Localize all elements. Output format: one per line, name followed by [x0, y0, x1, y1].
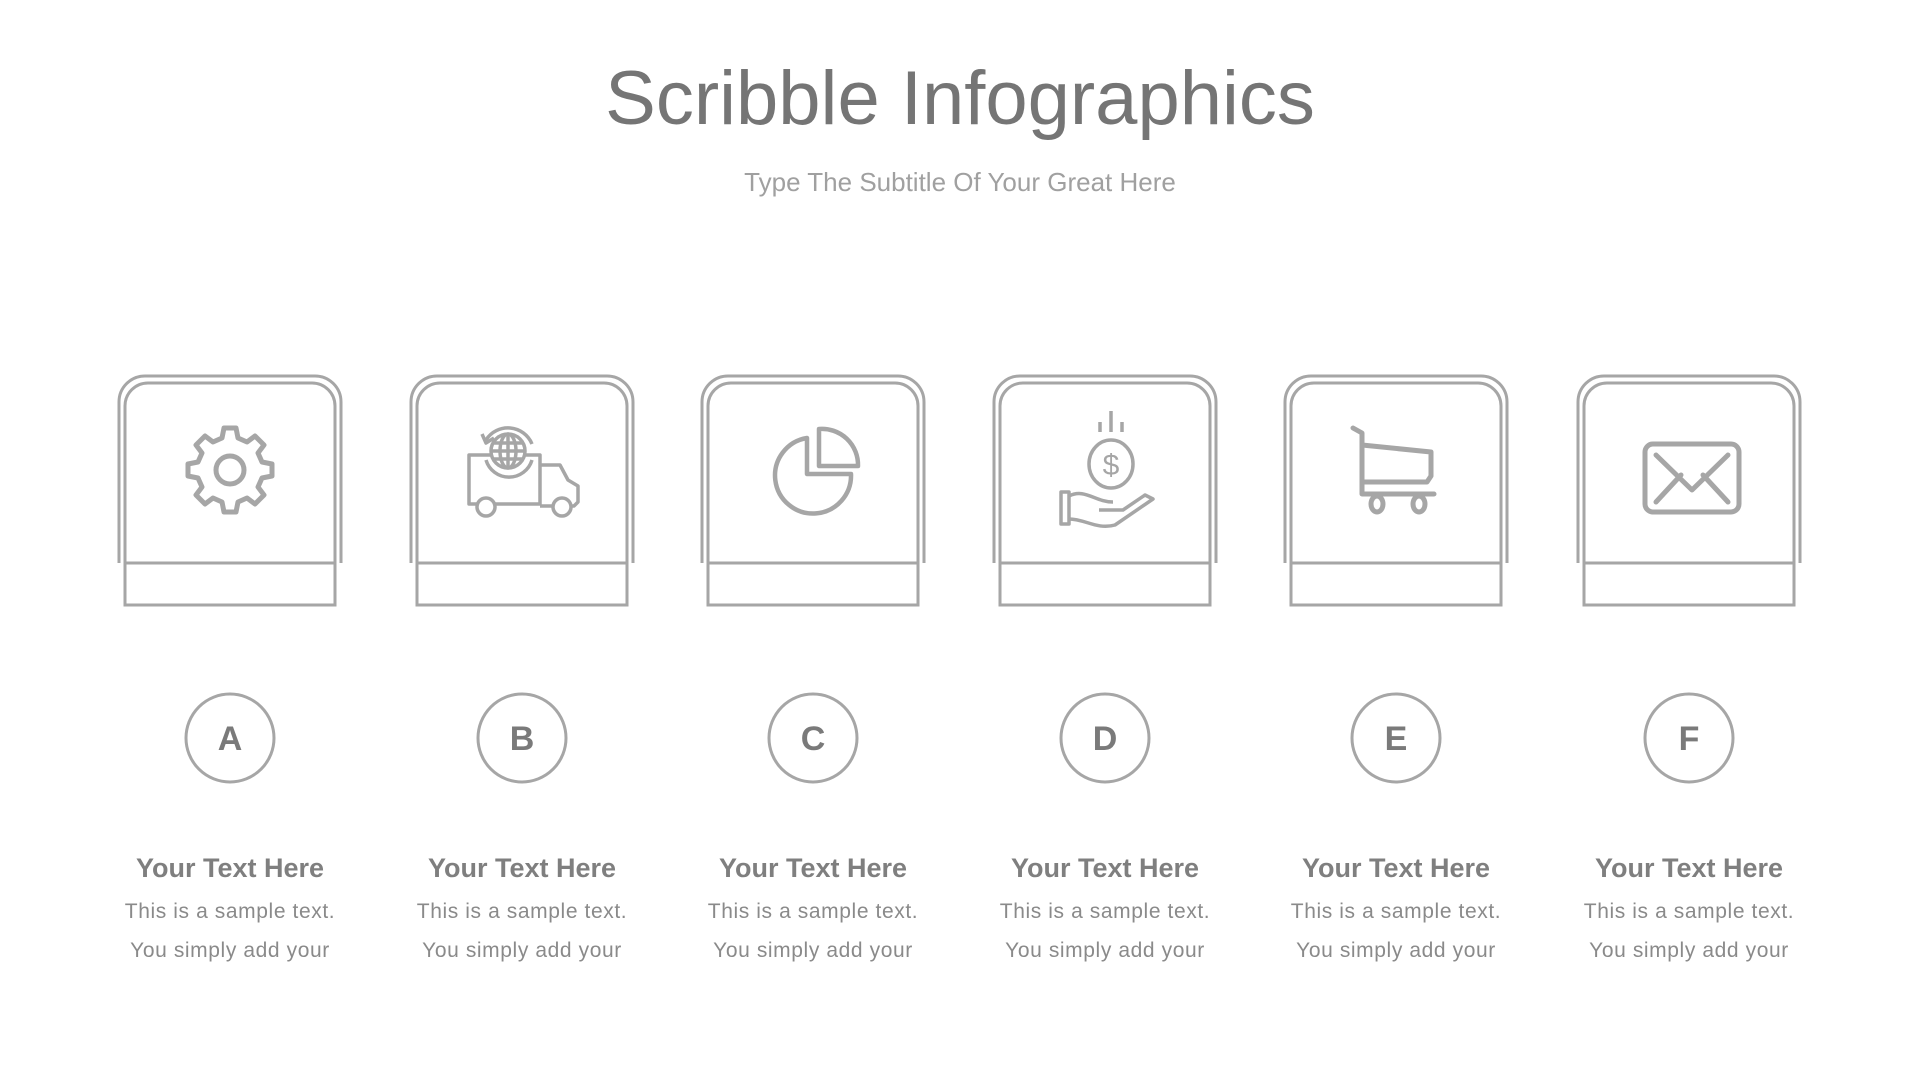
letter circle B — [478, 694, 566, 782]
text block E: Your Text Here — [1302, 853, 1490, 883]
text block C: You simply add your — [713, 939, 913, 962]
letter circle A: A — [218, 720, 242, 758]
text block B — [417, 853, 627, 962]
panel: A — [119, 376, 341, 962]
text block D: You simply add your — [1005, 939, 1205, 962]
panel: C — [702, 376, 924, 962]
text block D: This is a sample text. — [1000, 900, 1210, 923]
panel: F — [1578, 376, 1800, 962]
icon: coin in hand — [1061, 411, 1153, 526]
text block F: This is a sample text. — [1584, 900, 1794, 923]
panel: B — [411, 376, 633, 962]
panel: D — [994, 376, 1216, 962]
icon: pie chart — [775, 429, 858, 514]
text block F: Your Text Here — [1595, 853, 1783, 883]
text block B: This is a sample text. — [417, 900, 627, 923]
icon: coin in hand: $ — [1103, 449, 1120, 482]
text block A — [125, 853, 335, 962]
text block B: Your Text Here — [428, 853, 616, 883]
letter circle E: E — [1385, 720, 1407, 758]
letter circle E — [1352, 694, 1440, 782]
text block A: You simply add your — [130, 939, 330, 962]
text block C: Your Text Here — [719, 853, 907, 883]
letter circle B: B — [510, 720, 534, 758]
letter circle A — [186, 694, 274, 782]
text block C: This is a sample text. — [708, 900, 918, 923]
text block A: This is a sample text. — [125, 900, 335, 923]
letter circle D: D — [1093, 720, 1117, 758]
subtitle: Type The Subtitle Of Your Great Here — [744, 167, 1176, 197]
text block E — [1291, 853, 1501, 962]
letter circle F — [1645, 694, 1733, 782]
letter circle C — [769, 694, 857, 782]
text block F — [1584, 853, 1794, 962]
text block A: Your Text Here — [136, 853, 324, 883]
text block E: You simply add your — [1296, 939, 1496, 962]
letter circle D — [1061, 694, 1149, 782]
icon: envelope — [1645, 444, 1739, 512]
text block E: This is a sample text. — [1291, 900, 1501, 923]
text block F: You simply add your — [1589, 939, 1789, 962]
letter circle C: C — [801, 720, 825, 758]
title: Scribble Infographics — [605, 56, 1315, 141]
letter circle F: F — [1679, 720, 1699, 758]
icon: truck globe — [469, 428, 578, 516]
icon: gear — [188, 428, 272, 512]
text block D — [1000, 853, 1210, 962]
text block B: You simply add your — [422, 939, 622, 962]
text block D: Your Text Here — [1011, 853, 1199, 883]
text block C — [708, 853, 918, 962]
panel: E — [1285, 376, 1507, 962]
icon: shopping cart — [1353, 428, 1434, 512]
